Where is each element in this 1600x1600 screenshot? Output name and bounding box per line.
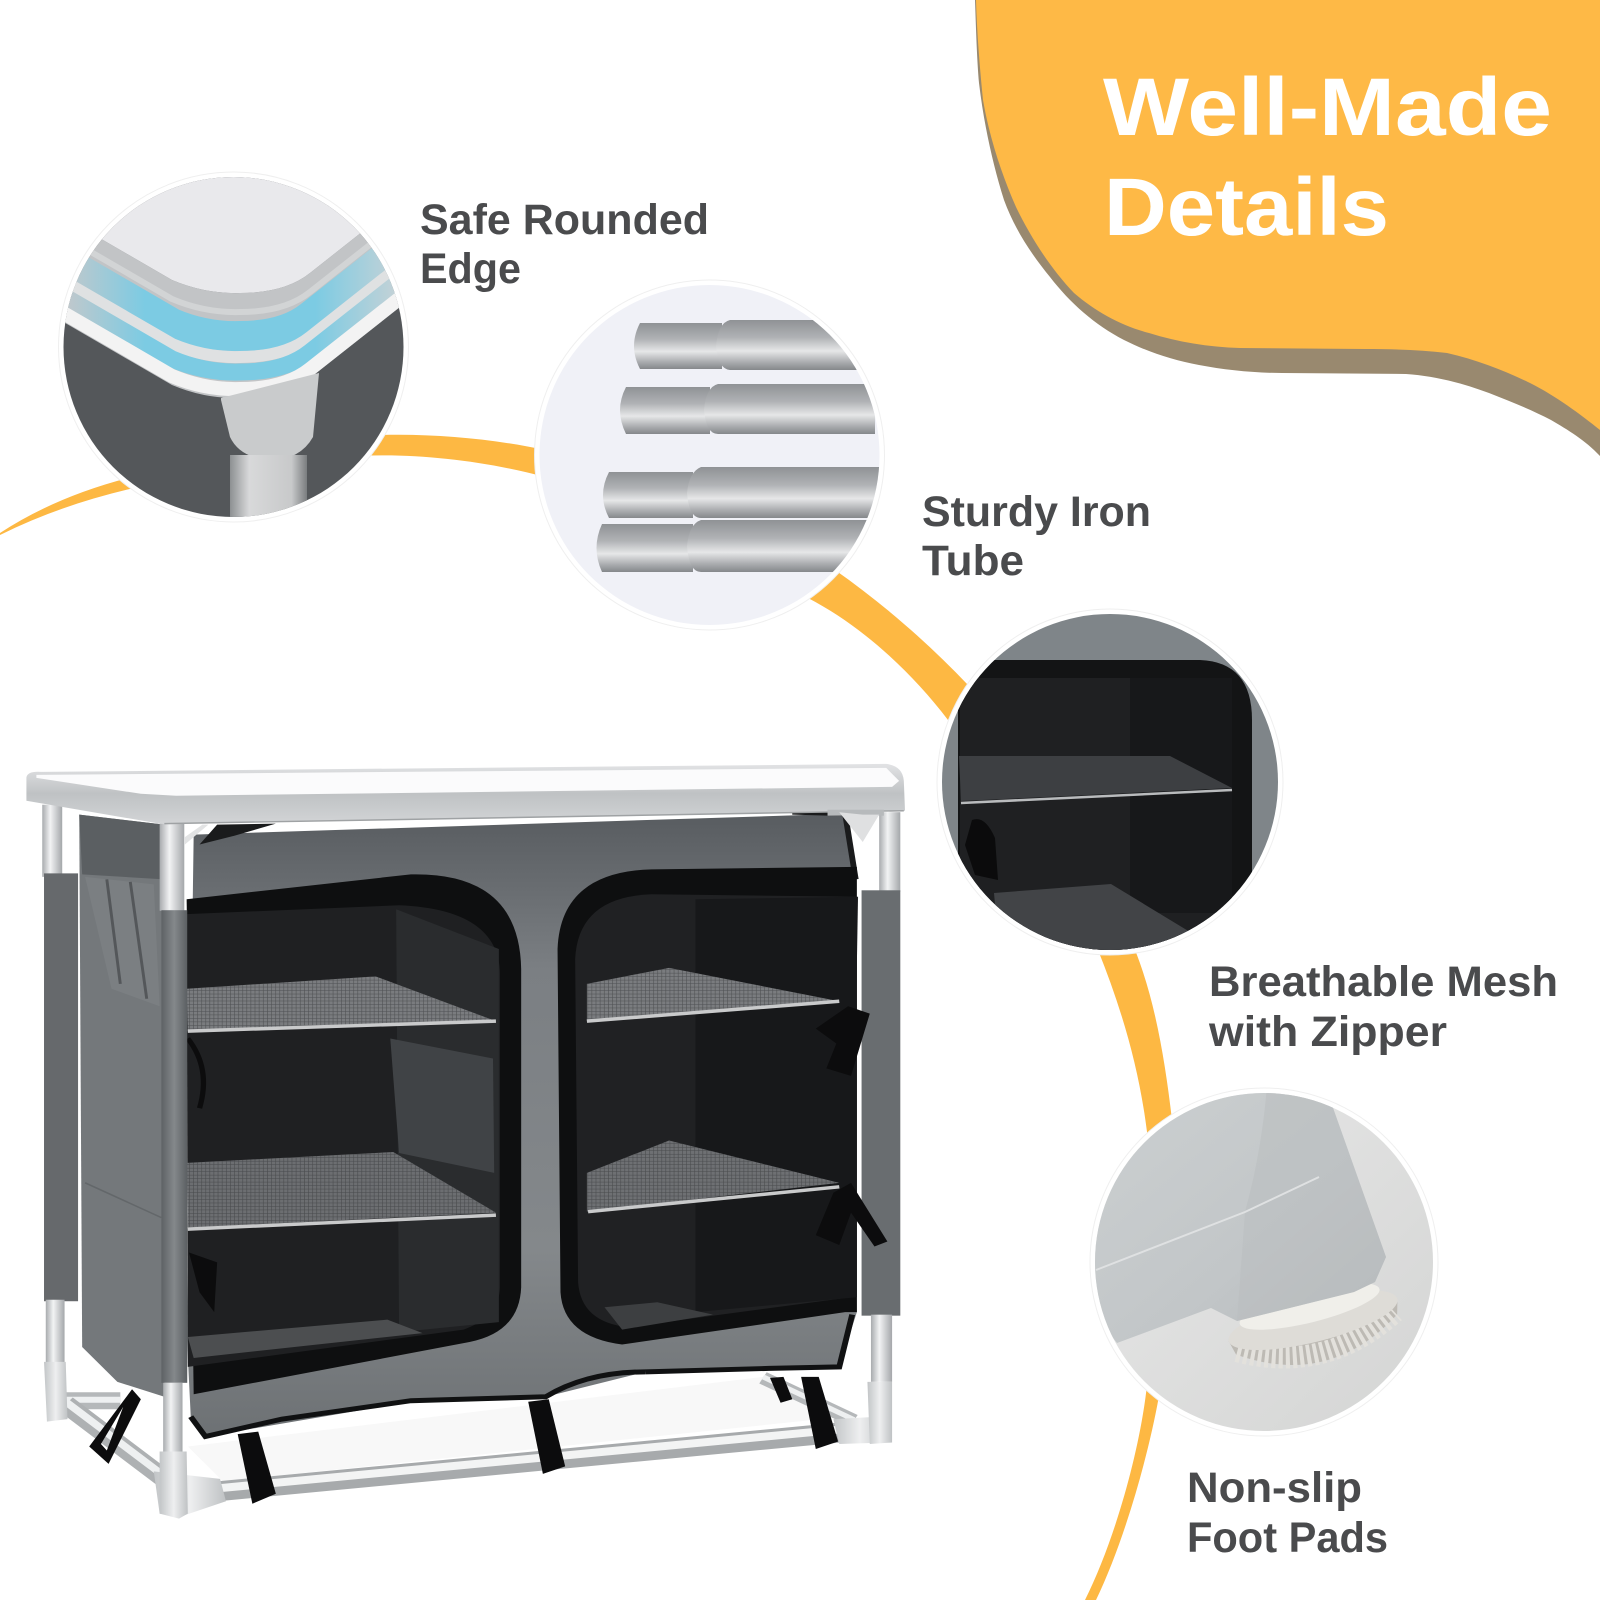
circle: non-slip foot pad [1085, 1085, 1445, 1440]
label: non-slip foot pads [1187, 1464, 1388, 1562]
label: safe rounded edge: Edge [420, 245, 521, 293]
label: breathable mesh with zipper [1208, 958, 1558, 1056]
tube 3 [603, 467, 890, 518]
tube 1 [634, 320, 857, 370]
title: Well-Made [1103, 62, 1552, 153]
left mesh door [187, 874, 521, 1394]
title: Details [1104, 162, 1389, 253]
lower frame [65, 1377, 886, 1516]
label: safe rounded edge: Safe Rounded [420, 196, 709, 244]
label: safe rounded edge [420, 196, 709, 293]
heading banner: orange wave with shadow [975, 0, 1600, 456]
label: sturdy iron tube: Tube [922, 537, 1024, 585]
tube 2 [620, 384, 875, 434]
table leg [221, 373, 319, 460]
back left leg [42, 805, 78, 1422]
main product: folding camping cupboard [26, 764, 905, 1519]
circle: safe rounded edge [58, 172, 409, 522]
table corner frame [65, 234, 399, 398]
front left leg [160, 824, 208, 1519]
table top [26, 764, 905, 842]
circle: sturdy iron tube [530, 280, 890, 630]
right mesh door [558, 867, 858, 1345]
connecting orange ribbon [0, 435, 1172, 1600]
label: non-slip foot pads: Non-slip [1187, 1464, 1362, 1512]
side panel [79, 815, 164, 1397]
floor shadow [188, 1377, 845, 1481]
label: sturdy iron tube [922, 488, 1151, 585]
label: non-slip foot pads: Foot Pads [1187, 1514, 1388, 1562]
circle: breathable mesh [930, 605, 1290, 960]
label: breathable mesh with zipper: with Zipper [1208, 1008, 1447, 1056]
title [1103, 62, 1552, 253]
back right leg [862, 812, 900, 1444]
label: sturdy iron tube: Sturdy Iron [922, 488, 1151, 536]
straps [89, 1006, 887, 1504]
label: breathable mesh with zipper: Breathable Mesh [1209, 958, 1558, 1006]
front panel [187, 812, 857, 1437]
tube 4 [596, 520, 890, 572]
foot pad [1228, 1284, 1402, 1368]
